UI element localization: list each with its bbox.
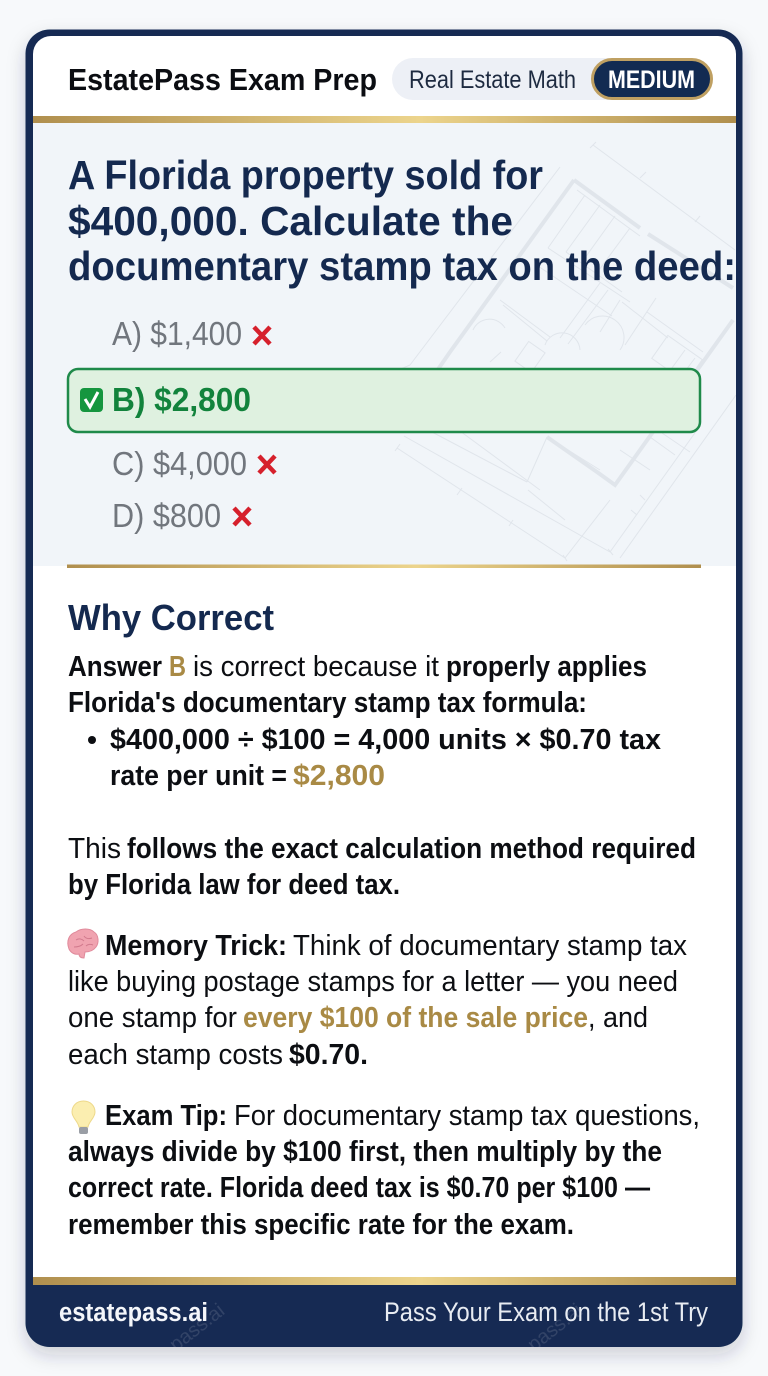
difficulty badge (592, 60, 712, 98)
memory trick: Think of documentary stamp tax (293, 930, 687, 962)
heading: why correct: Why Correct (68, 597, 274, 638)
category pill: Real Estate Math (409, 66, 576, 94)
icon: red cross (259, 456, 275, 473)
footer site name: estatepass.ai (59, 1299, 208, 1327)
icon: red cross (254, 327, 270, 344)
option C: C) $4,000 (112, 445, 247, 482)
icon: red cross (234, 508, 250, 525)
option A: A) $1,400 (112, 315, 242, 352)
header title: EstatePass Exam Prep (68, 62, 377, 97)
bullet calculation (88, 724, 661, 792)
option B correct: B) $2,800 (112, 381, 251, 418)
conclusion text (68, 833, 696, 901)
watermarks: pass.ai (166, 1300, 229, 1356)
question panel (33, 123, 736, 566)
option B correct (68, 369, 700, 432)
conclusion text: by Florida law for deed tax. (68, 869, 400, 901)
footer (33, 1277, 736, 1347)
footer tagline: Pass Your Exam on the 1st Try (384, 1297, 708, 1327)
watermarks: pass.ai (524, 1300, 587, 1356)
exam tip: remember this specific rate for the exam. (68, 1209, 574, 1241)
explanation text: B (169, 651, 186, 683)
explanation text: Florida's documentary stamp tax formula: (68, 687, 587, 719)
question text: documentary stamp tax on the deed: (68, 243, 736, 289)
exam tip: correct rate. Florida deed tax is $0.70 per $100 — (68, 1172, 650, 1204)
bullet calculation: $400,000 ÷ $100 = 4,000 units × $0.70 tax (110, 724, 661, 756)
explanation text: is correct because it (193, 651, 439, 683)
bullet calculation: rate per unit = (110, 760, 287, 792)
icon: brain (68, 929, 98, 958)
memory trick: like buying postage stamps for a letter — you need (68, 966, 678, 998)
memory trick (68, 929, 687, 1071)
bullet calculation: $2,800 (293, 760, 385, 792)
icon: green check box (80, 388, 103, 412)
question text: A Florida property sold for (68, 152, 543, 198)
memory trick: one stamp for (68, 1002, 237, 1034)
conclusion text: follows the exact calculation method required (127, 833, 696, 865)
exam tip (68, 1100, 700, 1241)
exam tip: For documentary stamp tax questions, (234, 1100, 700, 1132)
question text (68, 152, 736, 289)
category pill (392, 58, 632, 100)
conclusion text: This (68, 833, 121, 865)
explanation text (68, 651, 647, 719)
blueprint background (380, 142, 736, 561)
memory trick: $0.70. (289, 1039, 368, 1071)
explanation text: properly applies (446, 651, 647, 683)
exam tip: Exam Tip: (105, 1100, 227, 1132)
question text: $400,000. Calculate the (68, 198, 513, 244)
header (68, 58, 712, 100)
difficulty badge: MEDIUM (608, 66, 695, 94)
explanation text: Answer (68, 651, 162, 683)
memory trick: every $100 of the sale price (243, 1002, 588, 1034)
exam tip: always divide by $100 first, then multiply by the (68, 1136, 662, 1168)
watermarks (170, 1302, 583, 1347)
memory trick: each stamp costs (68, 1039, 283, 1071)
option D: D) $800 (112, 497, 221, 534)
memory trick: , and (588, 1002, 648, 1034)
icon: light bulb (72, 1101, 95, 1134)
memory trick: Memory Trick: (105, 930, 287, 962)
